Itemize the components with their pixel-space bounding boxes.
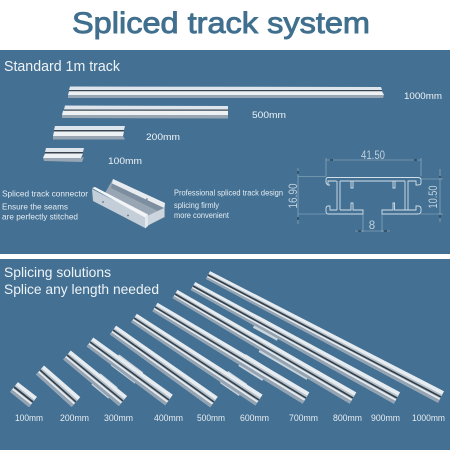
rail 500mm xyxy=(62,106,228,118)
text: design description: more convenient xyxy=(174,211,230,220)
label 1000mm: 1000mm xyxy=(404,91,442,102)
rail 1000mm xyxy=(206,271,444,403)
rail 300mm xyxy=(63,350,127,406)
text: connector description: are perfectly stitched xyxy=(2,212,78,222)
length labels: 200mm xyxy=(60,413,89,423)
length labels: 800mm xyxy=(333,413,362,423)
length labels: 300mm xyxy=(104,413,133,423)
text: connector description xyxy=(2,188,88,222)
text: design description xyxy=(174,188,283,220)
length labels: 500mm xyxy=(197,413,225,423)
rail 100mm xyxy=(10,382,37,407)
title: Spliced track system xyxy=(72,7,370,40)
divider band xyxy=(0,254,450,259)
label 500mm: 500mm xyxy=(252,110,286,121)
panel: standard 1m track xyxy=(0,50,450,254)
diagonal rails xyxy=(10,271,444,407)
rail 200mm xyxy=(36,366,80,407)
label 100mm: 100mm xyxy=(108,156,142,167)
profile outline xyxy=(326,178,421,214)
text: design description: Professional spliced track design xyxy=(174,188,283,198)
heading: splicing solutions xyxy=(4,264,159,297)
dimension lines xyxy=(298,158,443,232)
length labels: 1000mm xyxy=(412,413,445,423)
icon: connector bracket xyxy=(92,179,165,228)
length labels: 400mm xyxy=(154,413,183,423)
rail 100mm xyxy=(43,148,84,162)
dimension labels: 41.50 xyxy=(361,150,385,162)
dimension labels xyxy=(286,150,440,232)
dimension labels: 16.90 xyxy=(286,183,300,208)
heading: splicing solutions: Splice any length needed xyxy=(4,281,159,297)
length labels xyxy=(15,413,445,423)
rail 600mm xyxy=(131,314,263,405)
heading: standard track: Standard 1m track xyxy=(4,59,121,75)
text: connector description: Spliced track connector xyxy=(2,188,88,198)
text: connector description: Ensure the seams xyxy=(2,202,68,212)
dimension labels: 8 xyxy=(369,220,375,232)
chart: track cross-section drawing xyxy=(286,150,443,232)
rail 400mm xyxy=(87,338,173,405)
length labels: 900mm xyxy=(371,413,400,423)
rail 500mm xyxy=(110,326,218,407)
text: design description: splicing firmly xyxy=(174,201,219,210)
label 200mm: 200mm xyxy=(146,132,180,143)
rail 900mm xyxy=(191,282,400,404)
rail 800mm xyxy=(173,290,356,404)
rail 200mm xyxy=(53,126,125,140)
length labels: 700mm xyxy=(289,413,318,423)
length labels: 100mm xyxy=(15,413,43,423)
heading: splicing solutions: Splicing solutions xyxy=(4,264,111,280)
panel: splicing solutions xyxy=(0,259,450,450)
rail 700mm xyxy=(152,303,309,404)
dimension labels: 10.50 xyxy=(428,186,440,208)
length labels: 600mm xyxy=(240,413,269,423)
rail 1000mm xyxy=(68,86,384,98)
